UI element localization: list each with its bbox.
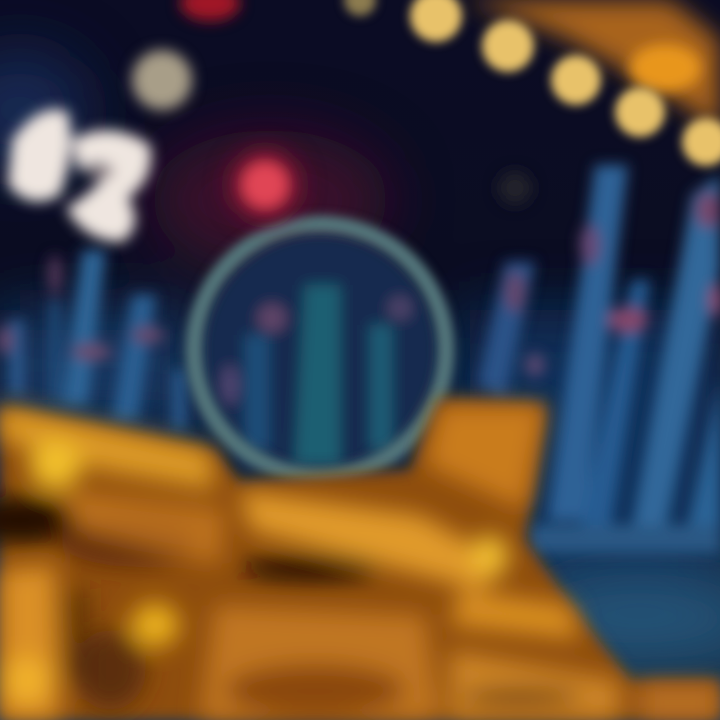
- coin highlights and shadows: [0, 405, 720, 720]
- gold coin stacks: [0, 400, 720, 720]
- magnifier ring: [194, 224, 446, 476]
- ring outline: [194, 224, 446, 476]
- white blobs: number shapes: [8, 109, 151, 242]
- ring interior: [202, 232, 438, 468]
- right blue bars: [478, 165, 720, 553]
- stack base: [0, 400, 720, 720]
- bokeh lights: [132, 0, 532, 221]
- golden light chain: [344, 0, 720, 166]
- left blue bars: [0, 250, 186, 430]
